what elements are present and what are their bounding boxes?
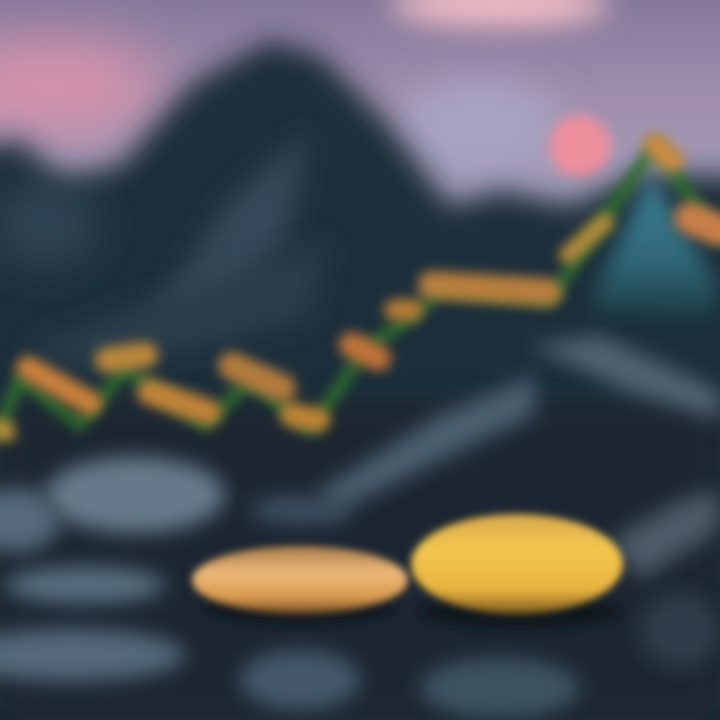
lower dark ground xyxy=(0,400,720,720)
foreground rocks xyxy=(0,457,720,718)
price line: green glow xyxy=(0,145,720,440)
price line: orange candles xyxy=(0,145,720,432)
right hand grey ridges xyxy=(320,335,720,580)
teal peak at right xyxy=(590,175,720,320)
dark mountains xyxy=(0,40,720,420)
sky background xyxy=(0,0,720,280)
coin: large right xyxy=(411,514,623,628)
coin: small left xyxy=(192,546,408,623)
sun xyxy=(549,115,611,177)
